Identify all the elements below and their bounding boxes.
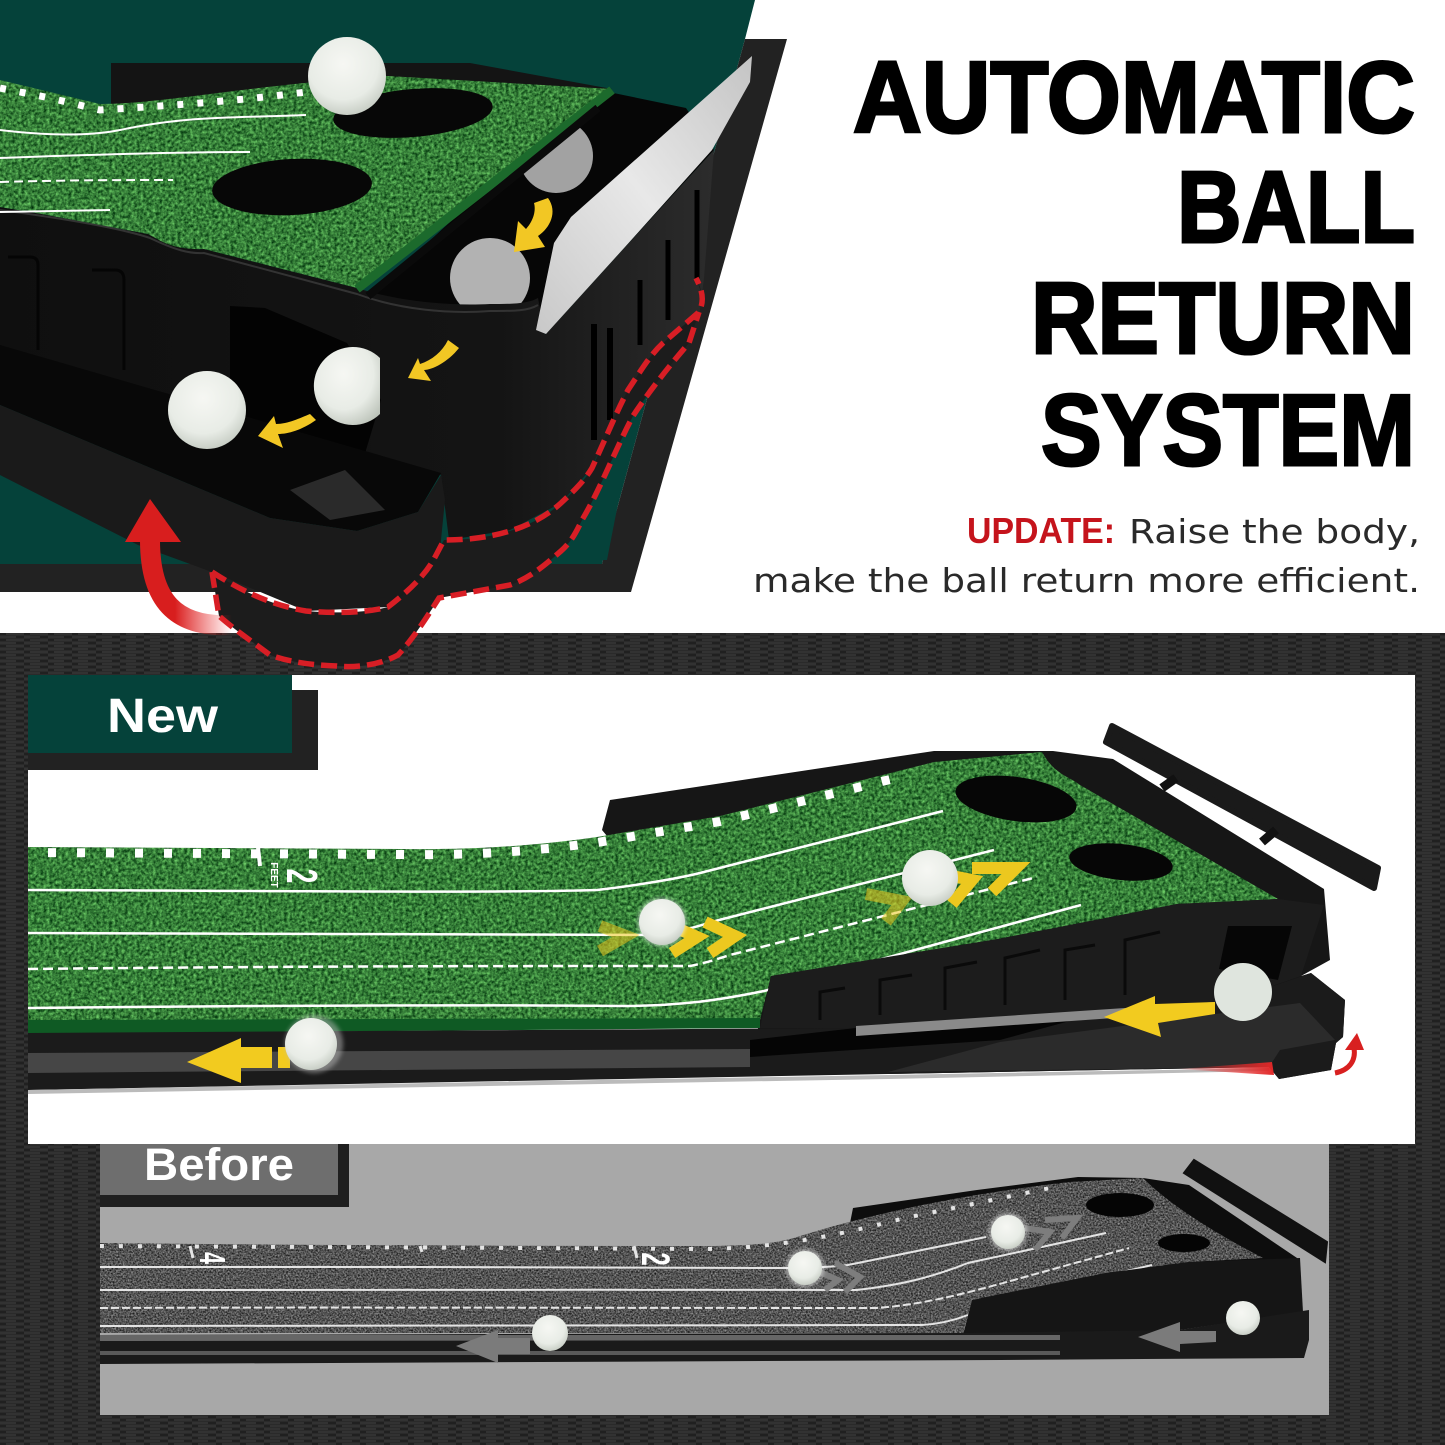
turf marker 2 FEET: FEET (268, 862, 279, 888)
frame edge (368, 108, 598, 296)
panel: new comparison (28, 675, 1415, 1144)
yellow chevrons (600, 868, 1016, 953)
ramp (963, 1258, 1303, 1335)
turf numbers: 4 (192, 1252, 232, 1264)
mat rear body (602, 751, 1345, 1079)
balls (285, 850, 1272, 1073)
icon: yellow arrows (258, 198, 553, 448)
backstop (1184, 1160, 1327, 1262)
hinges (1162, 778, 1276, 842)
lines (28, 777, 1081, 1008)
tray highlights (290, 470, 385, 520)
gray chevrons (815, 1218, 1077, 1292)
red lift wedge (1178, 1062, 1274, 1075)
tray outer wall (0, 405, 445, 611)
backstop (1106, 726, 1378, 888)
title: SYSTEM (1041, 375, 1415, 487)
track (100, 1310, 1309, 1364)
gray track arrows (456, 1322, 1216, 1363)
panel: before comparison (100, 1139, 1329, 1415)
tray and rail (28, 973, 1345, 1094)
title (853, 42, 1415, 487)
lower pad with dashed outline (212, 278, 704, 667)
title: BALL (1177, 152, 1415, 264)
gray lines (100, 1188, 1152, 1326)
turf (28, 752, 1278, 1022)
panel: dark textured background (0, 633, 1445, 1445)
tray (0, 345, 441, 531)
turf trim (28, 1018, 760, 1034)
green turf top (0, 76, 612, 288)
update note: UPDATE: (967, 510, 1115, 551)
label: Before: Before (144, 1139, 294, 1190)
panel: top close-up photo (0, 0, 787, 667)
turf numbers (192, 1252, 678, 1266)
label: New: New (107, 690, 219, 743)
turf trim (357, 90, 612, 289)
putting mat (28, 726, 1378, 1094)
body lip highlight (0, 210, 538, 312)
icon: small red arrow (1335, 1033, 1364, 1073)
holes (1086, 1193, 1210, 1252)
dark green backdrop (0, 0, 755, 564)
label: Before (100, 1139, 349, 1207)
update note: make the ball return more efficient. (753, 561, 1420, 600)
side ribs (8, 190, 697, 440)
title: AUTOMATIC (853, 42, 1415, 154)
gray turf (100, 1178, 1263, 1333)
rear body (848, 1177, 1300, 1333)
gray balls (532, 1213, 1260, 1351)
holes (953, 769, 1175, 885)
gray mat (100, 1160, 1327, 1364)
turf marker 2 FEET (268, 862, 327, 888)
balls in cavity (450, 119, 593, 318)
side window (230, 306, 381, 470)
ramp (760, 899, 1324, 1028)
turf lines (0, 88, 306, 212)
side plate (536, 56, 752, 334)
cavity behind turf (370, 89, 714, 335)
update note (753, 510, 1420, 600)
red dashed outline (212, 278, 702, 667)
update note: Raise the body, (1129, 512, 1420, 551)
label: New (28, 675, 318, 770)
turf numbers: 2 (634, 1252, 678, 1266)
backstop rear (111, 63, 612, 130)
title: RETURN (1031, 263, 1415, 375)
icon: red curved up arrow (125, 499, 232, 625)
turf marker 2 FEET: 2 (277, 869, 327, 883)
track arrows (187, 996, 1215, 1083)
ramp ribs and window (820, 926, 1292, 1020)
icon: cup holes (211, 82, 495, 219)
mat body (0, 150, 714, 540)
balls near window (168, 37, 386, 449)
